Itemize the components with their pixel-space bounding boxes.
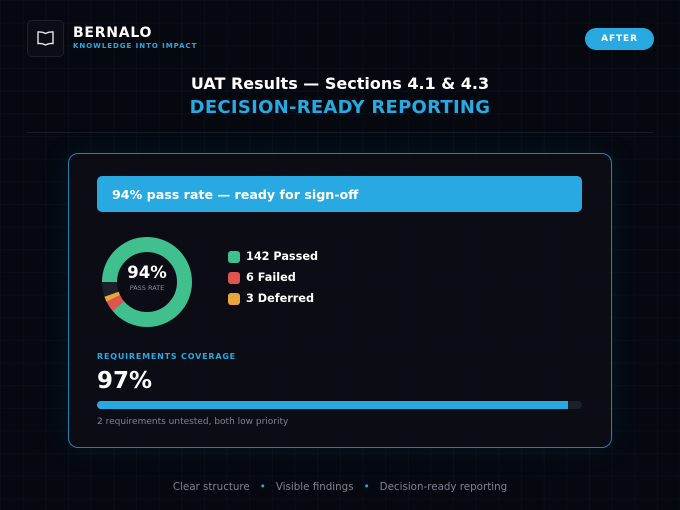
brand tagline: KNOWLEDGE INTO IMPACT bbox=[73, 42, 197, 50]
donut value: 94% bbox=[127, 262, 167, 282]
coverage progress bar bbox=[97, 401, 582, 409]
legend: passed: 142 Passed bbox=[246, 250, 318, 263]
footer: Clear structure • Visible findings • Decision-ready reporting bbox=[173, 481, 507, 493]
legend: failed: 6 Failed bbox=[246, 271, 296, 284]
coverage value: 97% bbox=[97, 368, 152, 394]
title: UAT Results — Sections 4.1 & 4.3 bbox=[191, 74, 489, 93]
panel: results card bbox=[68, 153, 612, 448]
after badge bbox=[585, 28, 654, 50]
after badge: AFTER bbox=[601, 34, 638, 44]
icon: open book bbox=[27, 20, 64, 57]
donut chart bbox=[102, 237, 192, 327]
brand header bbox=[27, 20, 197, 57]
legend: deferred: 3 Deferred bbox=[246, 292, 314, 305]
donut label: PASS RATE bbox=[130, 284, 164, 292]
coverage note: 2 requirements untested, both low priority bbox=[97, 416, 288, 426]
callout banner: 94% pass rate — ready for sign-off bbox=[112, 187, 358, 202]
coverage heading: REQUIREMENTS COVERAGE bbox=[97, 352, 236, 361]
subtitle: DECISION-READY REPORTING bbox=[190, 97, 490, 118]
callout banner bbox=[97, 176, 582, 212]
legend bbox=[228, 250, 318, 305]
brand name: BERNALO bbox=[73, 25, 152, 41]
